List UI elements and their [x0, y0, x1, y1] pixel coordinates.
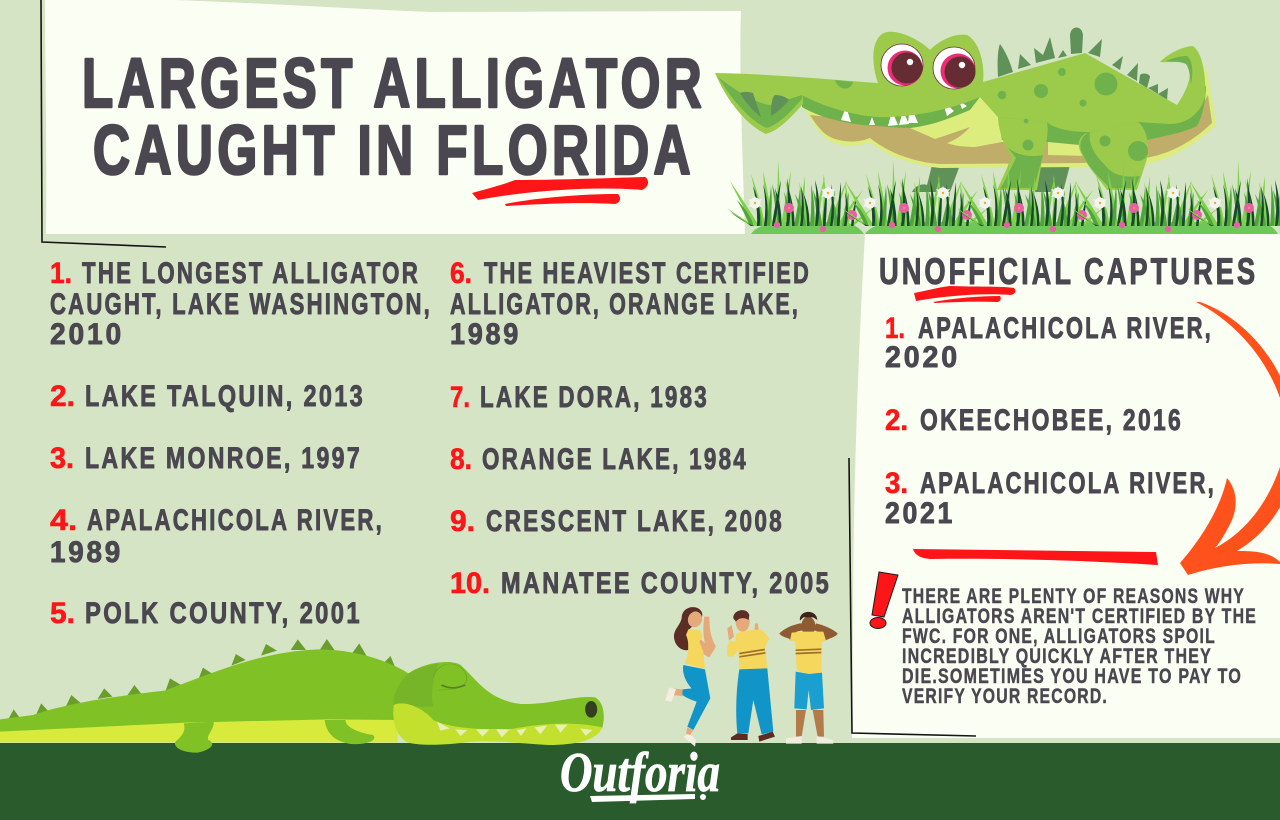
item 3: LAKE MONROE, 1997 — [85, 442, 362, 475]
unofficial item 1 — [885, 312, 1213, 374]
footer band — [0, 743, 1280, 820]
red divider — [913, 549, 1158, 565]
list: unofficial captures — [885, 312, 1216, 530]
item 8: ORANGE LAKE, 1984 — [482, 443, 748, 476]
teeth — [841, 100, 967, 126]
unofficial item 3 — [885, 467, 1216, 530]
item 10: 10. — [450, 567, 490, 600]
heading brush underline — [914, 286, 1015, 303]
unofficial item 1: 2020 — [885, 341, 960, 374]
unofficial item 2 — [885, 404, 1183, 437]
item 1: 1. — [50, 257, 72, 290]
item 4: 4. — [50, 504, 77, 537]
hind leg — [1079, 122, 1148, 190]
snout patches — [740, 92, 789, 117]
item 6 — [450, 257, 811, 351]
item 4: 1989 — [50, 536, 123, 569]
item 4: APALACHICOLA RIVER, — [87, 504, 384, 537]
mouth highlight — [910, 97, 1090, 156]
item 10 — [450, 567, 831, 600]
note text — [902, 585, 1257, 708]
panel frame line — [849, 458, 976, 736]
body spots — [998, 68, 1148, 161]
woman — [665, 607, 716, 747]
item 8 — [450, 443, 748, 476]
upper jaw shadow — [802, 85, 1206, 145]
unofficial item 3: 2021 — [885, 497, 955, 530]
item 9: CRESCENT LAKE, 2008 — [486, 505, 784, 538]
item 6: THE HEAVIEST CERTIFIED — [484, 257, 811, 290]
item 2: 2. — [50, 380, 75, 413]
item 7: LAKE DORA, 1983 — [480, 381, 709, 414]
item 1: 2010 — [50, 318, 124, 351]
illustration: grass and flowers — [727, 160, 1280, 234]
list: official captures, second column — [450, 257, 831, 600]
left eye — [881, 44, 923, 86]
dorsal spikes and back legs — [912, 28, 1168, 192]
belly tan — [810, 95, 1212, 164]
item 6: 6. — [450, 257, 472, 290]
item 6: ALLIGATOR, ORANGE LAKE, — [450, 288, 800, 321]
item 8: 8. — [450, 443, 472, 476]
item 5: POLK COUNTY, 2001 — [85, 597, 362, 630]
note text: VERIFY YOUR RECORD. — [902, 685, 1108, 708]
title — [82, 44, 706, 189]
head and body — [715, 32, 1205, 132]
illustration: three scared people — [665, 607, 838, 747]
panel: unofficial captures — [852, 234, 1280, 738]
item 9 — [450, 505, 784, 538]
icon: exclamation mark — [870, 572, 898, 628]
title: LARGEST ALLIGATOR — [82, 44, 706, 122]
item 3: 3. — [50, 442, 74, 475]
title: CAUGHT IN FLORIDA — [93, 111, 695, 189]
panel: title — [45, 0, 745, 234]
title frame line — [41, 0, 166, 247]
item 4 — [50, 504, 384, 569]
item 1: THE LONGEST ALLIGATOR — [82, 257, 420, 290]
unofficial item 1: 1. — [885, 312, 905, 345]
item 1: CAUGHT, LAKE WASHINGTON, — [50, 288, 432, 321]
snout underside — [715, 73, 803, 134]
unofficial item 3: 3. — [885, 467, 908, 500]
unofficial item 2: OKEECHOBEE, 2016 — [920, 404, 1183, 437]
item 5: 5. — [50, 597, 75, 630]
item 7 — [450, 381, 709, 414]
front leg — [997, 117, 1048, 190]
item 7: 7. — [450, 381, 470, 414]
arrow — [1180, 302, 1280, 575]
item 1 — [50, 257, 432, 351]
illustration: sleeping crocodile — [0, 639, 604, 753]
illustration: green crocodile — [715, 28, 1216, 192]
belly rim — [802, 65, 1216, 168]
man in shorts — [779, 612, 838, 744]
item 6: 1989 — [450, 318, 521, 351]
tail inner shadow — [1166, 56, 1192, 85]
item 9: 9. — [450, 505, 475, 538]
unofficial item 2: 2. — [885, 404, 908, 437]
title brush underline — [472, 177, 648, 206]
man in jeans — [727, 610, 775, 742]
logo: Outforia: Outforia — [560, 742, 720, 804]
list: official captures, first column — [50, 257, 432, 630]
item 10: MANATEE COUNTY, 2005 — [501, 567, 831, 600]
item 2: LAKE TALQUIN, 2013 — [85, 380, 365, 413]
right eye — [933, 47, 976, 89]
